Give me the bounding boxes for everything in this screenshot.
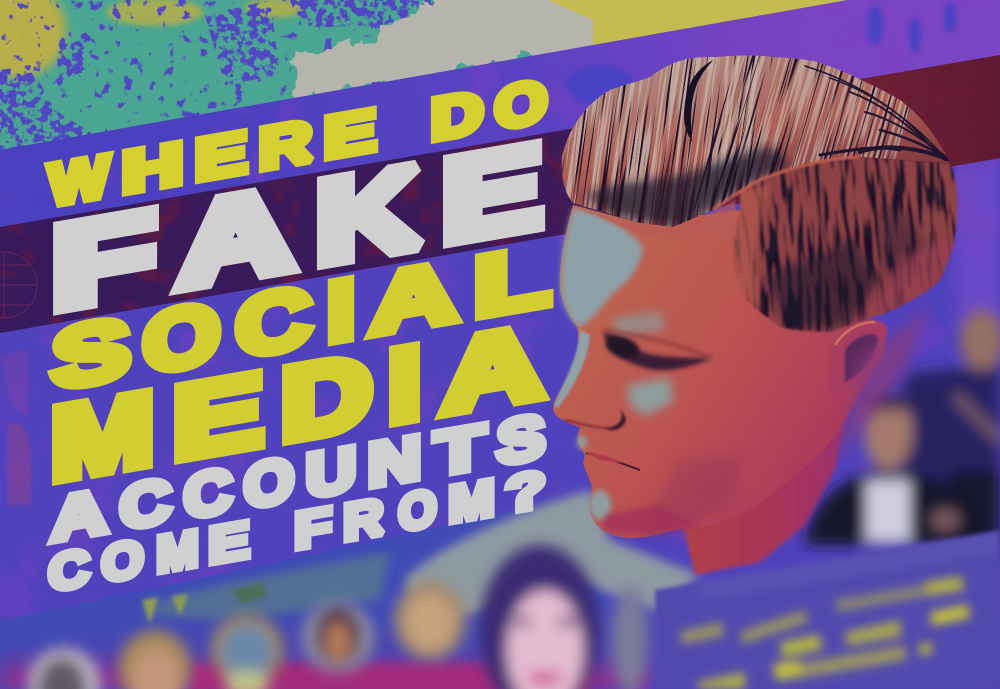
title line: COME FROM?: F [294, 496, 332, 560]
title line: MEDIA: D [281, 333, 372, 463]
hair parting line [713, 157, 860, 210]
title line: SOCIAL: S [52, 299, 130, 407]
title line: FAKE: F [52, 186, 155, 334]
title line: SOCIAL: L [474, 227, 550, 334]
portrait 7 [612, 585, 648, 689]
blue blotches near hair [566, 2, 956, 105]
grey nose bridge [554, 330, 590, 408]
title line: COME FROM?: E [208, 510, 249, 575]
title line: MEDIA: I [388, 324, 421, 444]
lower foliage below the band [0, 495, 620, 689]
title line: MEDIA: E [173, 351, 263, 481]
title line: COME FROM?: C [48, 537, 90, 602]
portrait 4 [302, 601, 374, 673]
title line: COME FROM?: O [102, 528, 144, 593]
title line: WHERE DO: H [122, 131, 183, 206]
man head portrait [553, 56, 959, 578]
title line: FAKE: E [442, 120, 542, 267]
forehead hairline glow [575, 200, 738, 240]
title line: WHERE DO: E [195, 120, 247, 193]
blurred people at the right [805, 310, 1000, 550]
title line: FAKE: K [316, 141, 420, 288]
title line: COME FROM?: O [398, 478, 436, 542]
title line: COME FROM?: R [344, 487, 384, 551]
title line: COME FROM?: M [448, 468, 495, 533]
title line: ACCOUNTS: N [368, 423, 421, 501]
background: foliage photo at top [0, 0, 847, 150]
title line: FAKE: A [178, 162, 293, 312]
side hair below the parting [732, 157, 959, 334]
title line: COME FROM?: ? [506, 459, 546, 524]
neck [683, 400, 850, 575]
face [553, 205, 885, 538]
portrait 2 [119, 630, 191, 689]
bottom gradient background [0, 608, 650, 689]
grey forehead patch [561, 208, 643, 328]
background: dark maroon slanted stripe [0, 40, 1000, 340]
title line: MEDIA: M [51, 370, 154, 502]
ear [830, 319, 887, 396]
jaw shading [640, 455, 745, 535]
title line: MEDIA: A [442, 303, 543, 435]
grey cheek patch [627, 378, 673, 416]
title line: ACCOUNTS: S [497, 402, 545, 479]
portrait 6: woman [480, 545, 600, 689]
thick dark strand [684, 60, 713, 142]
title line: ACCOUNTS: C [184, 455, 232, 532]
front hair above the parting [562, 56, 950, 227]
curved top right strands [805, 66, 950, 160]
title line: WHERE DO: W [49, 143, 110, 218]
title line: ACCOUNTS: U [306, 434, 356, 511]
blurred magenta behind the ear [838, 300, 930, 460]
title line: ACCOUNTS: O [244, 445, 294, 522]
portrait 1 [28, 648, 100, 689]
title line: ACCOUNTS: T [435, 412, 485, 489]
title line: SOCIAL: C [236, 268, 311, 375]
background: window arch detail at left [0, 252, 37, 318]
title line: WHERE DO: O [495, 68, 547, 142]
dark roots along parting [585, 145, 790, 228]
grey lip and chin patches [577, 435, 611, 520]
row of blurred profile portraits [28, 545, 648, 689]
blue caption panel with blurred text [655, 530, 1000, 689]
title line: SOCIAL: O [143, 284, 220, 391]
eye [603, 330, 712, 370]
title line: WHERE DO: D [431, 79, 483, 153]
title line: WHERE DO: R [259, 109, 312, 182]
nostril [605, 408, 626, 430]
man shoulder, blurred [405, 490, 700, 625]
person: suited man [805, 394, 985, 545]
portrait 3 [211, 614, 283, 689]
person: standing figure far right [900, 310, 1000, 550]
grey brow patch [612, 312, 665, 336]
blurred yellow caption lines [680, 576, 970, 689]
title line: WHERE DO: E [324, 98, 376, 171]
portrait 5 [394, 580, 466, 660]
title line: COME FROM?: M [156, 519, 198, 583]
mouth [585, 452, 640, 470]
title [48, 68, 550, 602]
background: blurred figures at left edge [0, 350, 32, 505]
title line: SOCIAL: A [370, 243, 457, 352]
title line: ACCOUNTS: A [51, 477, 107, 555]
title line: ACCOUNTS: C [120, 466, 171, 543]
title line: SOCIAL: I [327, 261, 355, 360]
